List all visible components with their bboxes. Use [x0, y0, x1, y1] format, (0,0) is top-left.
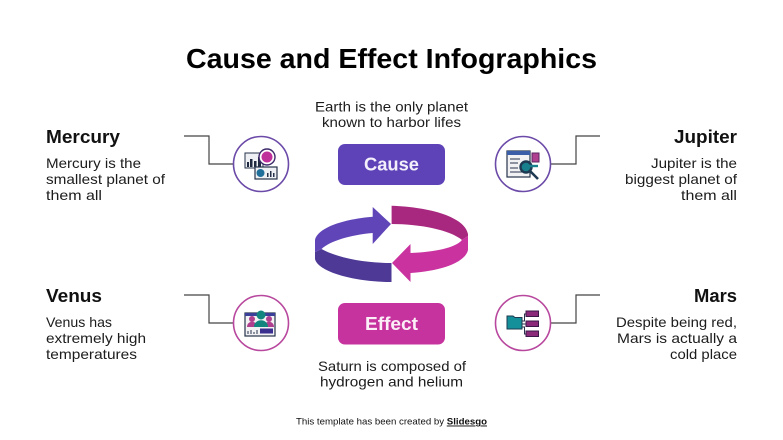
effect description — [318, 358, 466, 390]
title: Cause and Effect Infographics — [186, 43, 597, 74]
cause box — [338, 144, 445, 185]
mercury text — [46, 127, 165, 203]
mars text: Mars — [694, 286, 737, 306]
purple arrow lower band — [315, 249, 392, 282]
mars text — [616, 286, 737, 362]
connector: jupiter — [551, 136, 600, 164]
venus text: Venus — [46, 286, 102, 306]
mars text: Mars is actually a — [617, 330, 737, 346]
mercury text: smallest planet of — [46, 171, 165, 187]
effect box — [338, 303, 445, 344]
footer credit: This template has been created by Slidesgo — [296, 416, 487, 428]
jupiter text: biggest planet of — [625, 171, 737, 187]
venus text — [46, 286, 146, 362]
venus text: Venus has — [46, 314, 112, 330]
connector: mercury — [184, 136, 233, 164]
jupiter text — [625, 127, 737, 203]
venus text: temperatures — [46, 346, 137, 362]
mercury text: Mercury is the — [46, 155, 141, 171]
circular arrows — [315, 206, 468, 282]
mars text: cold place — [670, 346, 737, 362]
venus text: extremely high — [46, 330, 146, 346]
jupiter text: Jupiter — [674, 127, 737, 147]
mars text: Despite being red, — [616, 314, 737, 330]
cause description: Earth is the only planet — [315, 98, 468, 114]
effect description: Saturn is composed of — [318, 358, 466, 374]
cause description: known to harbor lifes — [322, 114, 461, 130]
connector: venus — [184, 295, 233, 323]
mercury text: Mercury — [46, 127, 120, 147]
cause description — [315, 98, 468, 130]
icon: jupiter search — [496, 136, 550, 192]
mercury text: them all — [46, 187, 102, 203]
magenta arrow upper band — [392, 206, 468, 240]
icon: mars folder — [496, 296, 550, 350]
jupiter text: them all — [681, 187, 737, 203]
connector: mars — [551, 295, 600, 323]
cause box: Cause — [364, 154, 419, 174]
magenta arrow head and lower band — [392, 236, 468, 282]
icon: venus people — [234, 296, 288, 350]
jupiter text: Jupiter is the — [651, 155, 737, 171]
icon: mercury charts — [234, 136, 288, 192]
effect box: Effect — [365, 314, 418, 334]
effect description: hydrogen and helium — [320, 374, 463, 390]
purple arrow head and upper band — [315, 207, 391, 252]
